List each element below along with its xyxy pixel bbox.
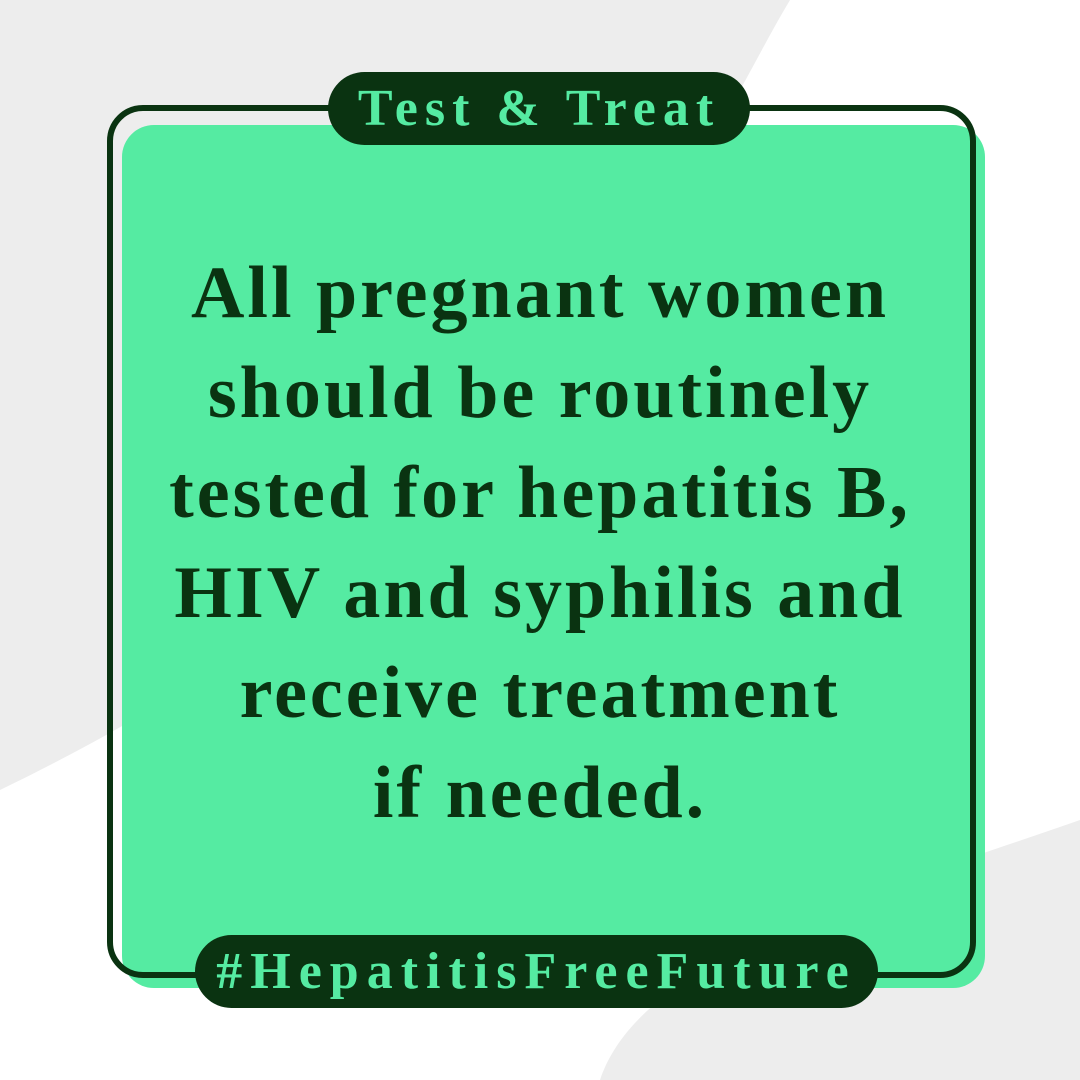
panel outline xyxy=(107,105,976,978)
main text block: receive treatment xyxy=(240,652,840,734)
heading pill: Test & Treat xyxy=(328,72,750,145)
main text block: if needed. xyxy=(373,752,707,834)
main text block: All pregnant women xyxy=(191,252,889,334)
heading pill: Test & Treat: Test & Treat xyxy=(358,80,720,137)
main text block: HIV and syphilis and xyxy=(174,552,906,634)
main text block xyxy=(169,252,911,834)
hashtag pill: #HepatitisFreeFuture xyxy=(216,943,857,1000)
main text block: should be routinely xyxy=(208,352,872,434)
panel: green card xyxy=(122,125,985,988)
main text block: tested for hepatitis B, xyxy=(169,452,911,534)
